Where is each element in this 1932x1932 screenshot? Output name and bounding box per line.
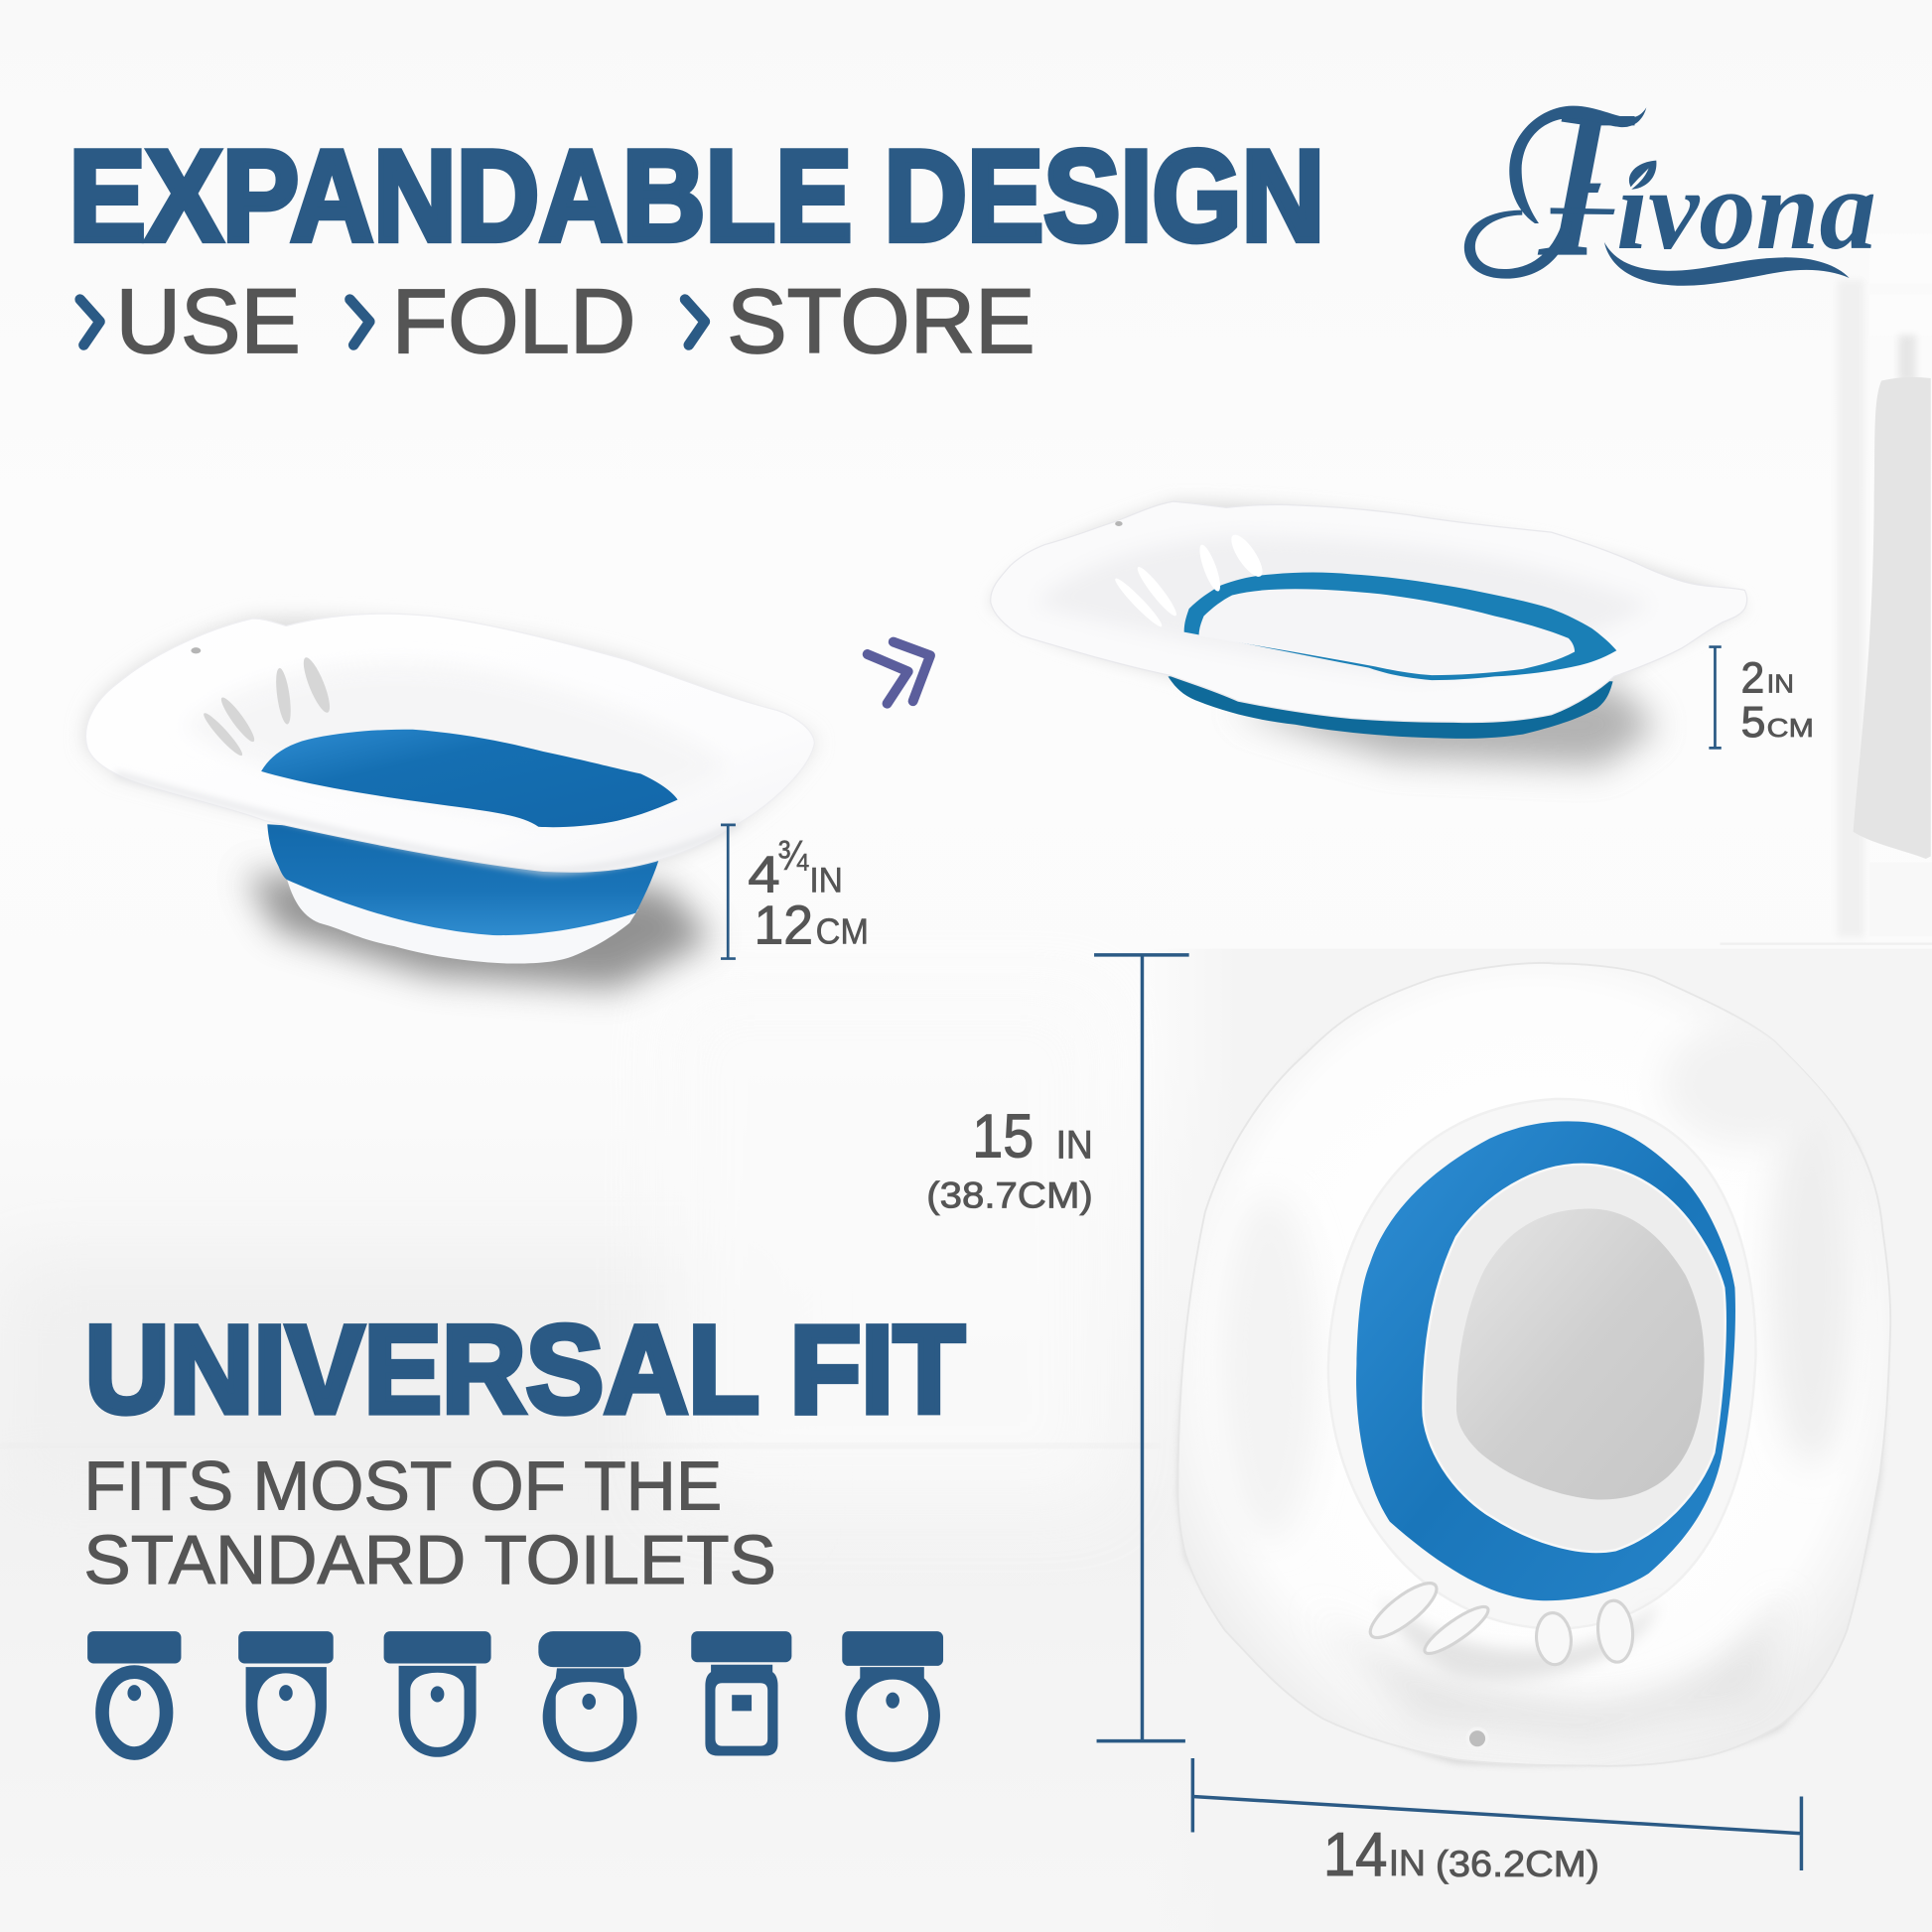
shadow: folded basin <box>1232 684 1657 766</box>
width bracket <box>1192 1758 1801 1870</box>
top view blue band <box>1356 1121 1735 1600</box>
text: fits most of the standard toilets <box>83 1447 776 1598</box>
chevron: store <box>685 300 705 345</box>
top view rim <box>1177 963 1890 1766</box>
length value: 15 <box>972 1102 1034 1171</box>
length metric: (38.7CM) <box>926 1173 1093 1215</box>
dimension: folded height <box>1709 647 1814 748</box>
folded rim halo <box>991 501 1744 711</box>
dimension: expanded height <box>721 824 869 959</box>
folded base ring <box>1169 665 1613 739</box>
logo flourish: lower loop <box>1464 210 1572 279</box>
folded unit inches: IN <box>1767 668 1794 698</box>
height unit centimetres: CM <box>816 911 869 952</box>
folded blue ring <box>1184 572 1616 680</box>
logo initial: F <box>1537 68 1681 302</box>
width value: 14 <box>1323 1821 1387 1889</box>
folded rim <box>991 501 1747 723</box>
title: expandable design: EXPANDABLE DESIGN <box>69 123 1324 268</box>
folded value centimetres: 5 <box>1741 699 1765 747</box>
folded overflow hole <box>1115 521 1123 526</box>
basin overflow hole <box>191 647 201 653</box>
length bracket <box>1094 955 1189 1741</box>
basin inner blue <box>261 730 678 827</box>
folded interior shading <box>1035 536 1651 678</box>
logo: fivona <box>1463 105 1874 286</box>
height value inches: 4 <box>748 847 780 904</box>
basin inner slope <box>185 663 727 823</box>
product: top view basin <box>1177 963 1890 1766</box>
length unit: IN <box>1056 1124 1093 1168</box>
icon: flat top toilet <box>238 1631 334 1760</box>
folded value inches: 2 <box>1741 654 1764 702</box>
height fraction: ¾ <box>777 832 809 879</box>
icon: round toilet <box>842 1631 943 1762</box>
dimension: width <box>1192 1758 1801 1889</box>
chevron: use <box>80 300 100 345</box>
basin base white <box>287 880 638 964</box>
folded bracket <box>1709 647 1722 748</box>
line two: STANDARD TOILETS <box>83 1521 776 1598</box>
top view hole <box>1467 1728 1487 1748</box>
logo leaf <box>1629 161 1656 190</box>
width unit: IN <box>1389 1842 1426 1883</box>
basin rim <box>85 614 814 872</box>
logo flourish: top swash <box>1509 106 1646 223</box>
folded unit centimetres: CM <box>1767 713 1814 743</box>
line one: FITS MOST OF THE <box>83 1447 722 1524</box>
icon: square front toilet <box>384 1631 491 1757</box>
top view drain slots <box>1363 1575 1635 1666</box>
subtitle: use fold store <box>80 271 1035 372</box>
towel on rail <box>1854 377 1931 859</box>
height bracket <box>721 824 736 959</box>
icon: elongated toilet <box>87 1631 181 1753</box>
icon row: toilet shapes <box>87 1631 943 1762</box>
logo underline swash <box>1604 242 1850 286</box>
width metric: (36.2CM) <box>1436 1843 1599 1884</box>
basin collapsible blue wall <box>267 824 663 935</box>
label: use: USE <box>116 271 301 372</box>
label: fold: FOLD <box>392 271 635 372</box>
height unit inches: IN <box>809 863 843 900</box>
top view shadow <box>1177 967 1884 1765</box>
icon: square toilet <box>691 1631 791 1756</box>
top view raised contour <box>1328 1099 1756 1629</box>
label: store: STORE <box>727 271 1035 372</box>
arrow: double chevron <box>868 642 930 704</box>
height value centimetres: 12 <box>755 896 813 956</box>
top view inner white ring <box>1423 1165 1725 1552</box>
product: expanded basin <box>85 614 814 964</box>
basin rim halo <box>85 618 814 863</box>
shadow: expanded basin <box>246 875 712 988</box>
dimension: length <box>926 955 1189 1741</box>
product: folded basin <box>991 501 1747 739</box>
icon: wide toilet <box>538 1631 640 1762</box>
top view soft shading <box>1220 1023 1854 1743</box>
chevron: fold <box>349 300 369 345</box>
folded bowl centre <box>1199 589 1575 675</box>
basin rim front edge shading <box>116 773 740 872</box>
top view drain recess shading <box>1380 1595 1657 1681</box>
basin drain slots <box>201 655 335 759</box>
heading: universal fit: UNIVERSAL FIT <box>85 1300 965 1439</box>
logo crossbar <box>1551 207 1615 214</box>
top view grey bowl <box>1456 1208 1705 1499</box>
logo wordmark: ıvona <box>1616 147 1876 273</box>
folded drain slots <box>1112 530 1268 629</box>
